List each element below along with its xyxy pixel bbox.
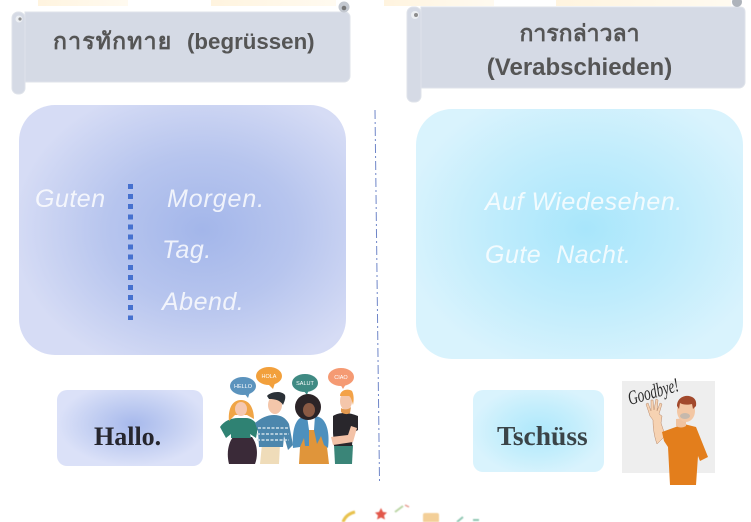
word: Guten: Guten xyxy=(35,185,106,213)
heading text: การกล่าวลา xyxy=(519,20,640,46)
word: Tag: Tag. xyxy=(162,236,212,264)
banner: greeting heading xyxy=(12,2,350,94)
word: Auf Wiedersehen: Auf Wiedesehen. xyxy=(485,188,683,216)
heading text: (begrüssen) xyxy=(187,29,315,54)
woman in denim jacket xyxy=(293,394,329,464)
card: Hallo xyxy=(57,390,203,466)
speech bubbles: HELLO xyxy=(234,384,253,390)
banner: farewell heading xyxy=(406,0,746,102)
card: Tschuss xyxy=(473,390,604,472)
man in striped sweater xyxy=(255,392,293,464)
illustration: goodbye man xyxy=(622,374,715,485)
label: Tschuss: Tschüss xyxy=(497,420,588,451)
center divider xyxy=(374,110,380,481)
heading text: (Verabschieden) xyxy=(487,54,672,81)
speech bubbles: CIAO xyxy=(334,375,348,381)
speech bubbles xyxy=(230,367,354,398)
man in black shirt xyxy=(331,390,358,464)
heading text xyxy=(53,28,315,54)
man waving xyxy=(646,396,708,485)
woman in green xyxy=(220,400,258,464)
decoration: bottom confetti xyxy=(341,504,480,522)
word: Morgen: Morgen. xyxy=(167,185,265,213)
heading text: การทักทาย xyxy=(53,28,172,54)
speech bubbles: HOLA xyxy=(262,374,277,380)
word: Gute Nacht: Gute Nacht. xyxy=(485,241,631,269)
word: Abend: Abend. xyxy=(162,288,244,316)
panel: greetings xyxy=(19,105,346,355)
illustration: people talking xyxy=(220,367,358,464)
label: Hallo: Hallo. xyxy=(94,422,161,451)
speech bubbles: SALUT xyxy=(296,381,315,387)
decorative top strips xyxy=(38,0,731,6)
panel: farewells xyxy=(416,109,743,359)
dotted divider xyxy=(128,184,133,320)
heading text xyxy=(487,20,672,81)
